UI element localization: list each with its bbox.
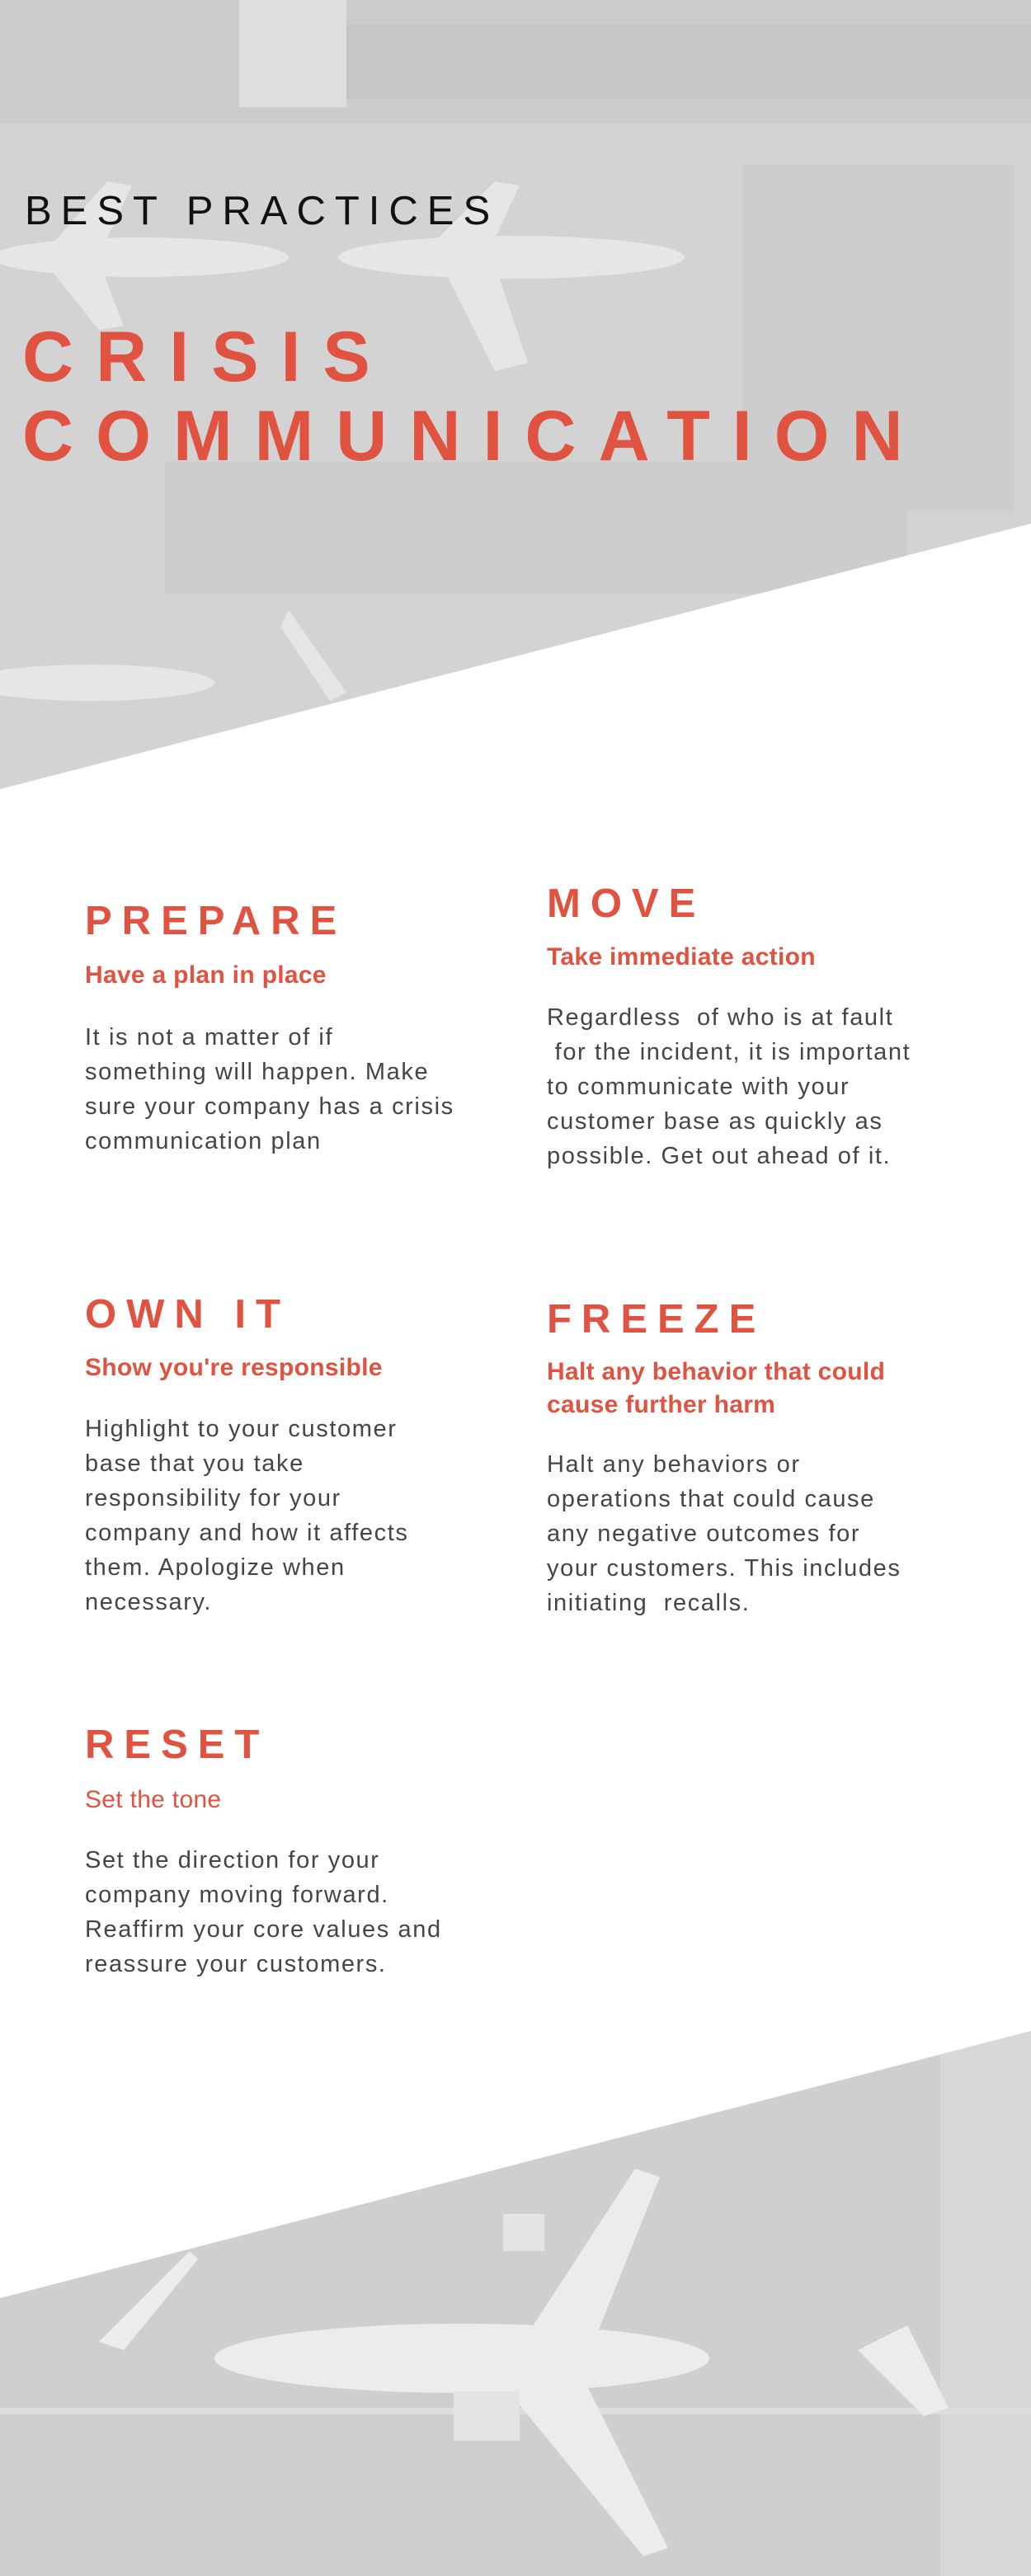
- text: move body: possible. Get out ahead of it.: [547, 1143, 891, 1169]
- text: reset body: reassure your customers.: [85, 1951, 387, 1977]
- text: own it body: them. Apologize when: [85, 1554, 346, 1581]
- text: own it body: [85, 1416, 409, 1615]
- panel: prepare: [85, 899, 454, 1154]
- text: freeze body: operations that could cause: [547, 1486, 875, 1512]
- text: freeze body: Halt any behaviors or: [547, 1451, 801, 1478]
- subheading: reset: Set the tone: [85, 1786, 221, 1813]
- icon: airplane: [99, 2169, 949, 2556]
- text: freeze body: initiating recalls.: [547, 1590, 750, 1616]
- text: own it body: necessary.: [85, 1589, 212, 1615]
- text: move body: customer base as quickly as: [547, 1108, 883, 1135]
- text: move body: Regardless of who is at fault: [547, 1004, 893, 1031]
- subheading: own it: Show you're responsible: [85, 1354, 383, 1381]
- heading: own it: OWN IT: [85, 1292, 290, 1337]
- text: move body: for the incident, it is important: [555, 1039, 911, 1065]
- text: reset body: company moving forward.: [85, 1882, 389, 1908]
- text: own it body: company and how it affects: [85, 1520, 409, 1546]
- text: reset body: Reaffirm your core values and: [85, 1916, 442, 1943]
- text: freeze body: your customers. This includes: [547, 1555, 901, 1582]
- text: move body: [547, 1004, 911, 1169]
- text: own it body: Highlight to your customer: [85, 1416, 397, 1442]
- subheading: freeze: cause further harm: [547, 1391, 775, 1418]
- panel: move: [547, 881, 911, 1169]
- panel: freeze: [547, 1297, 901, 1616]
- subheading: move: Take immediate action: [547, 943, 816, 971]
- subheading: prepare: Have a plan in place: [85, 961, 327, 989]
- text: prepare body: sure your company has a crisis: [85, 1093, 454, 1120]
- text: prepare body: [85, 1024, 454, 1154]
- heading: reset: RESET: [85, 1723, 269, 1767]
- text: own it body: base that you take: [85, 1450, 304, 1477]
- subheading: freeze: [547, 1358, 885, 1418]
- text: prepare body: communication plan: [85, 1128, 322, 1154]
- text: prepare body: It is not a matter of if: [85, 1024, 333, 1051]
- heading: prepare: PREPARE: [85, 899, 346, 943]
- panel: reset: [85, 1723, 442, 1977]
- text: move body: to communicate with your: [547, 1074, 850, 1100]
- bottom photo background: [0, 2031, 1031, 2576]
- title: CRISIS COMMUNICATION: [22, 317, 925, 476]
- title: CRISIS COMMUNICATION: COMMUNICATION: [22, 397, 925, 476]
- heading: freeze: FREEZE: [547, 1297, 765, 1342]
- text: freeze body: [547, 1451, 901, 1616]
- subheading: freeze: Halt any behavior that could: [547, 1358, 885, 1385]
- text: own it body: responsibility for your: [85, 1485, 341, 1511]
- text: reset body: [85, 1847, 442, 1977]
- top photo background: [0, 0, 1031, 789]
- text: reset body: Set the direction for your: [85, 1847, 380, 1873]
- title: CRISIS COMMUNICATION: CRISIS: [22, 317, 393, 397]
- text: prepare body: something will happen. Make: [85, 1059, 429, 1085]
- heading: move: MOVE: [547, 881, 705, 926]
- text: freeze body: any negative outcomes for: [547, 1521, 860, 1547]
- panel: own it: [85, 1292, 409, 1615]
- subtitle: BEST PRACTICES: BEST PRACTICES: [25, 189, 499, 233]
